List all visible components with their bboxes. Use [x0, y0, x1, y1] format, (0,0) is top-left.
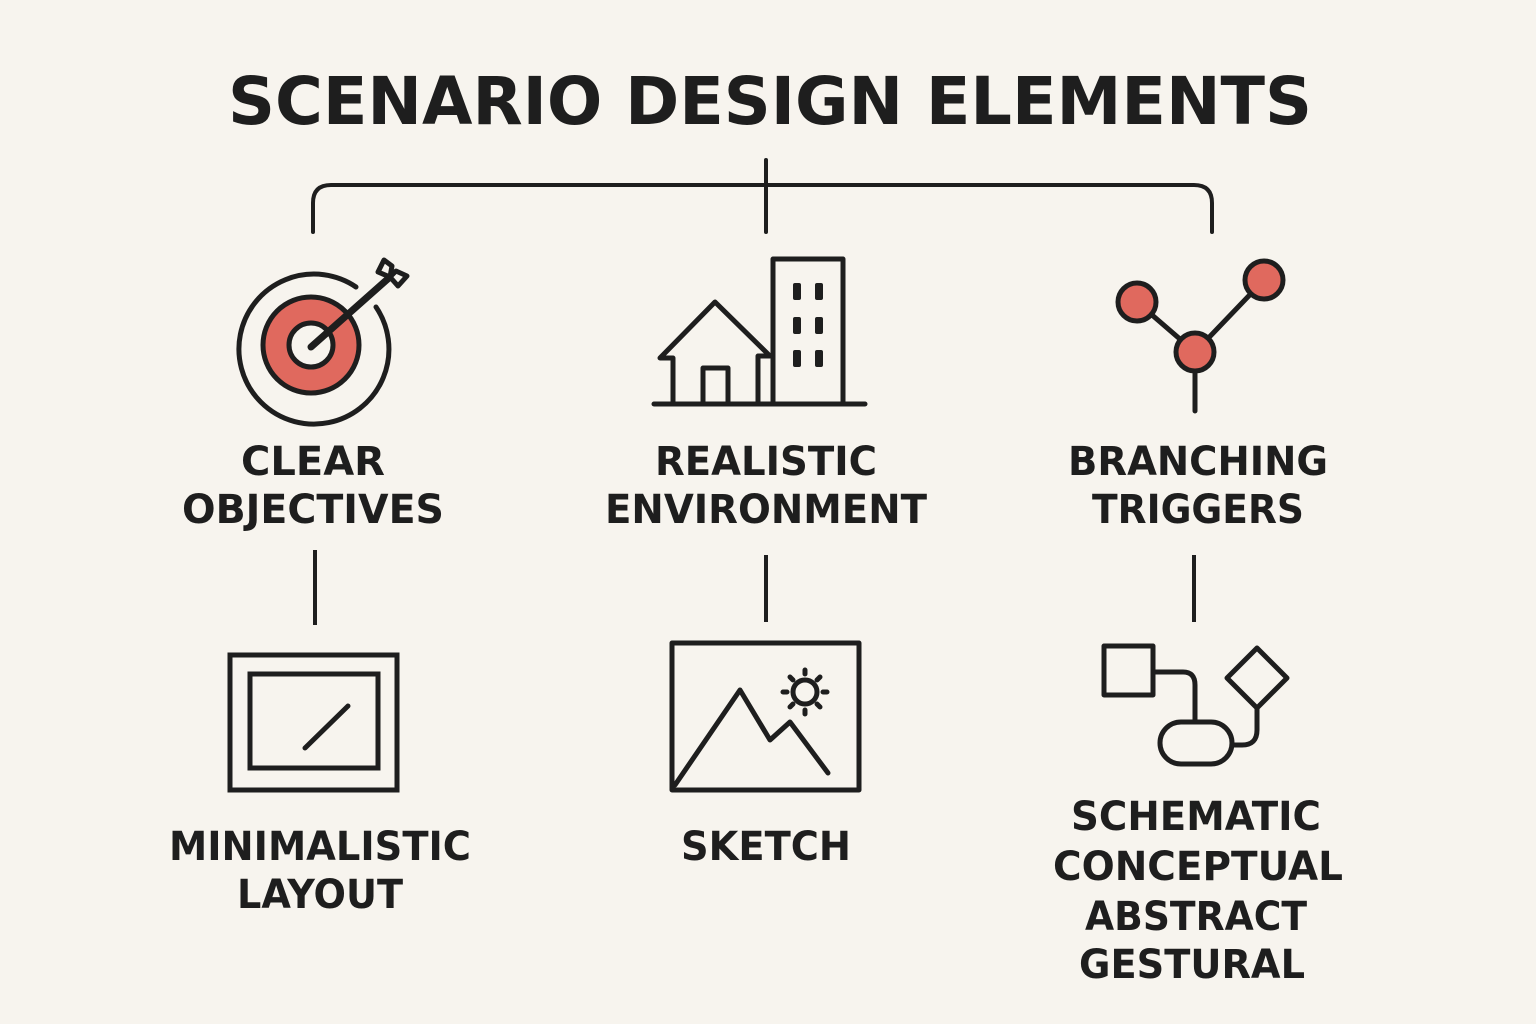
label: realistic environment: REALISTIC [655, 439, 877, 485]
label: schematic list: ABSTRACT [1085, 894, 1308, 940]
icon: house and building [654, 259, 865, 404]
label: sketch: SKETCH [681, 824, 851, 870]
connectors: vertical lines [315, 550, 1194, 625]
label: schematic list: CONCEPTUAL [1053, 844, 1343, 890]
icon: target with arrow [239, 260, 407, 424]
label: clear objectives: CLEAR [241, 439, 385, 485]
label: realistic environment [605, 439, 928, 533]
label: schematic list [1053, 794, 1343, 988]
label: branching triggers: TRIGGERS [1092, 487, 1304, 533]
label: clear objectives: OBJECTIVES [182, 487, 444, 533]
label: clear objectives [182, 439, 444, 533]
label: minimalistic layout: MINIMALISTIC [169, 824, 471, 870]
title: SCENARIO DESIGN ELEMENTS [228, 63, 1312, 140]
label: branching triggers: BRANCHING [1068, 439, 1328, 485]
icon: schematic flow [1104, 646, 1287, 764]
icon: branching nodes [1118, 261, 1283, 411]
icon: sketch picture [672, 643, 859, 790]
connector: tree bracket [313, 160, 1212, 232]
label: branching triggers [1068, 439, 1328, 533]
icon: minimalistic layout [230, 655, 397, 790]
label: realistic environment: ENVIRONMENT [605, 487, 928, 533]
label: schematic list: GESTURAL [1079, 942, 1305, 988]
label: schematic list: SCHEMATIC [1071, 794, 1321, 840]
label: minimalistic layout [169, 824, 471, 918]
label: minimalistic layout: LAYOUT [237, 872, 404, 918]
